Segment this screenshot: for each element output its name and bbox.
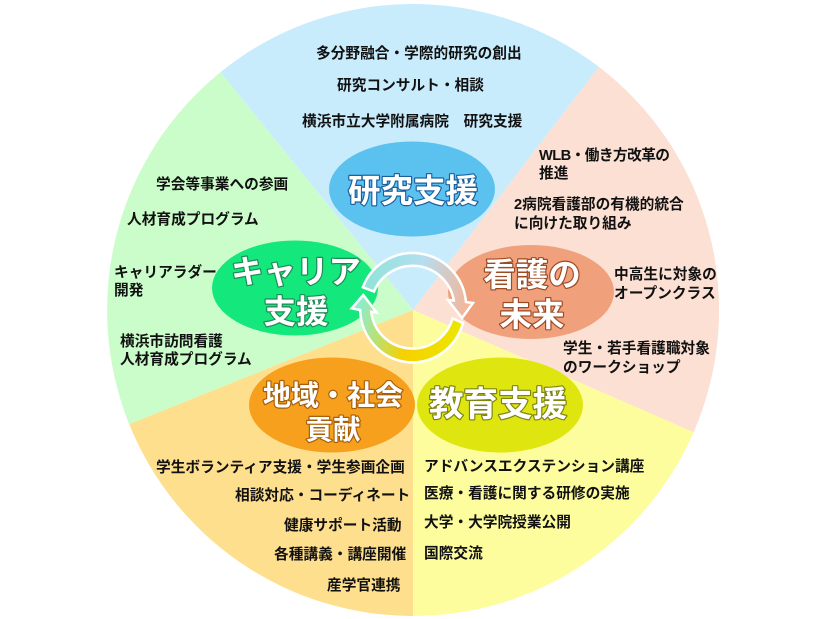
text block: career items: キャリアラダー: [114, 263, 217, 281]
ellipse: research heading: [329, 142, 495, 236]
panel: community wedge: [129, 310, 413, 616]
text block: research items: [302, 44, 523, 130]
ellipse: community heading: 貢献: [306, 414, 361, 445]
text block: nursing future items: 学生・若手看護職対象: [563, 339, 710, 357]
text block: community items: 相談対応・コーディネート: [235, 486, 410, 504]
text block: community items: 各種講義・講座開催: [274, 545, 407, 563]
text block: career items: 横浜市訪問看護: [120, 332, 223, 350]
panel: nursing future wedge: [413, 67, 719, 432]
text block: nursing future items: のワークショップ: [563, 359, 681, 376]
ellipse: nursing future heading: 未来: [499, 297, 565, 333]
ellipse: nursing future heading: 看護の: [483, 257, 581, 293]
text block: career items: 人材育成プログラム: [120, 350, 252, 368]
ellipse: community heading: [249, 358, 415, 452]
arrow: lower cycle arrow: [352, 295, 463, 362]
text block: research items: 多分野融合・学際的研究の創出: [316, 44, 522, 62]
ellipse: community heading: 地域・社会: [263, 380, 403, 411]
text block: career items: 学会等事業への参画: [156, 175, 288, 193]
text block: community items: [156, 458, 410, 594]
text block: education items: 国際交流: [424, 544, 483, 562]
text block: career items: 人材育成プログラム: [127, 210, 259, 228]
text block: nursing future items: 推進: [539, 164, 569, 182]
text block: research items: 研究コンサルト・相談: [337, 76, 484, 94]
ellipse: career heading: [212, 240, 378, 336]
ellipse: nursing future heading: [448, 245, 614, 339]
text block: education items: [424, 457, 645, 562]
text block: community items: 健康サポート活動: [284, 516, 402, 534]
text block: nursing future items: 中高生に対象の: [614, 265, 717, 283]
panel: education wedge: [413, 310, 694, 616]
ellipse: career heading: 支援: [263, 294, 329, 330]
text block: career items: 開発: [114, 281, 144, 299]
text block: education items: 大学・大学院授業公開: [424, 513, 571, 531]
arrow: upper cycle arrow: [363, 253, 473, 318]
text block: education items: アドバンスエクステンション講座: [424, 457, 645, 475]
text block: community items: 学生ボランティア支援・学生参画企画: [156, 458, 405, 476]
text block: education items: 医療・看護に関する研修の実施: [424, 484, 630, 502]
text block: community items: 産学官連携: [327, 576, 401, 594]
text block: nursing future items: 2病院看護部の有機的統合: [514, 195, 684, 213]
ellipse: career heading: キャリア: [231, 254, 361, 290]
text block: nursing future items: WLB・働き方改革の: [539, 146, 670, 164]
ellipse: education heading: 教育支援: [429, 386, 567, 424]
panel: research wedge: [220, 4, 599, 310]
text block: research items: 横浜市立大学附属病院 研究支援: [302, 112, 523, 130]
ellipse: research heading: 研究支援: [348, 173, 478, 209]
text block: nursing future items: に向けた取り組み: [514, 215, 632, 232]
text block: nursing future items: [514, 146, 717, 376]
panel: career wedge: [107, 72, 413, 424]
text block: career items: [114, 175, 288, 368]
text block: nursing future items: オープンクラス: [614, 285, 716, 302]
ellipse: education heading: [417, 358, 583, 452]
